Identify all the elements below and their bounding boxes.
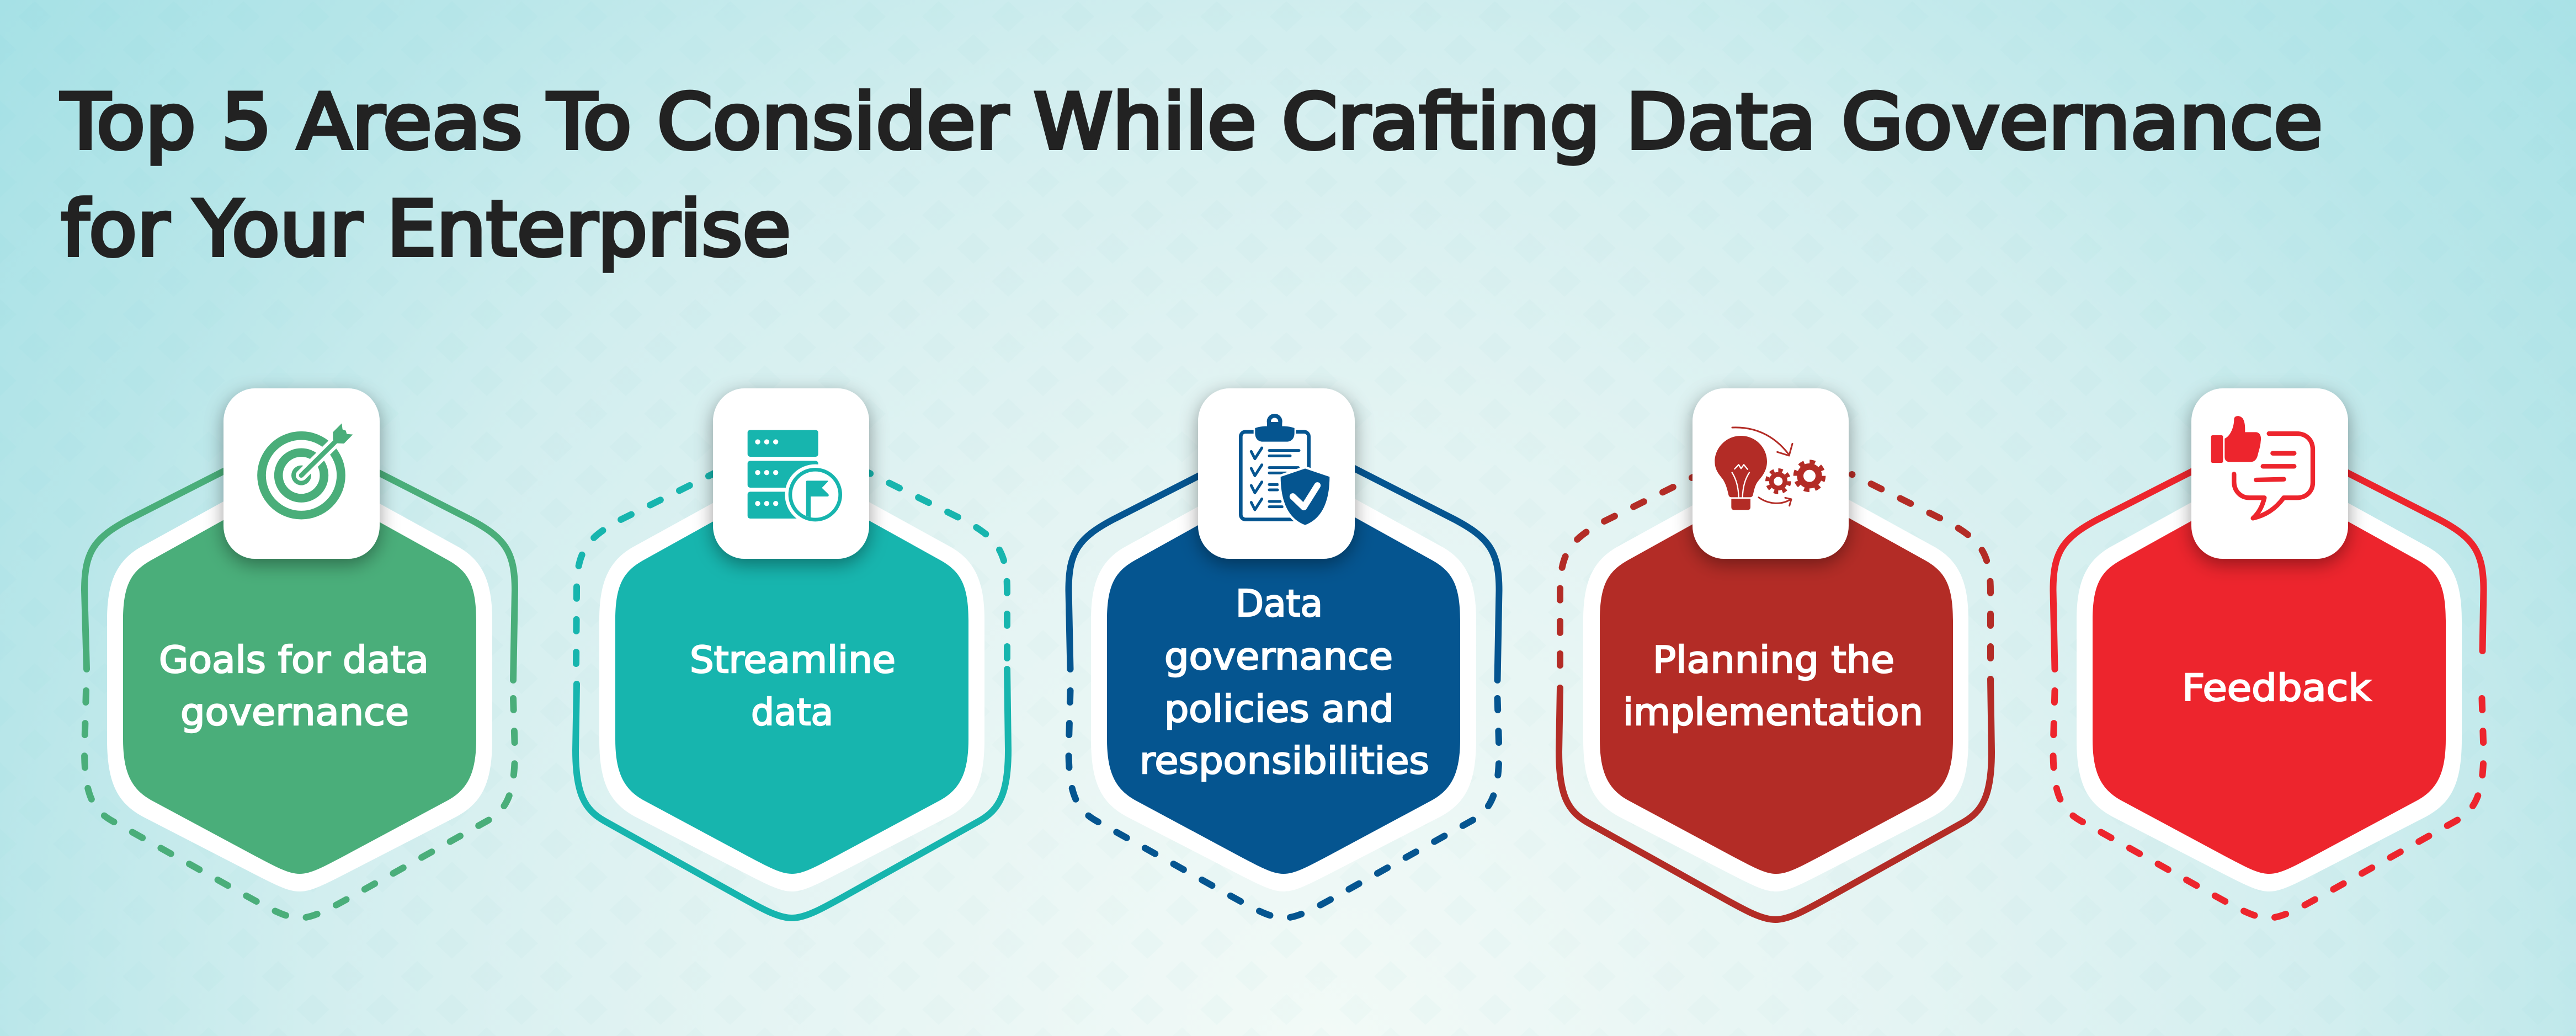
label: data <box>751 691 833 734</box>
label: responsibilities <box>1140 739 1429 782</box>
white hexagon border <box>599 460 984 891</box>
icon card <box>2191 388 2348 559</box>
white hexagon border <box>1583 460 1968 891</box>
label <box>1623 638 1923 734</box>
icon card <box>1198 388 1355 559</box>
panel: goals for data governance <box>84 388 515 918</box>
icon: thumbs up with speech bubble <box>2211 416 2313 518</box>
blue hexagon <box>1107 478 1460 874</box>
title <box>61 77 2323 274</box>
label: Streamline <box>690 638 896 681</box>
label <box>159 638 429 734</box>
label <box>690 638 896 734</box>
white hexagon border <box>1091 460 1476 891</box>
icon: light bulb, arrows and gears <box>1715 428 1824 510</box>
outer ring: solid top, dashed bottom <box>84 432 515 918</box>
icon card <box>1693 388 1849 559</box>
panel: planning the implementation <box>1559 388 1992 920</box>
label: governance <box>1164 635 1393 678</box>
label: policies and <box>1164 687 1394 730</box>
icon: clipboard checklist with shield <box>1241 416 1329 525</box>
panel: streamline data <box>576 388 1008 918</box>
outer ring: solid top, dashed bottom <box>2053 432 2483 918</box>
icon card <box>713 388 869 559</box>
outer ring: dashed top, solid bottom <box>1559 474 1992 920</box>
label: implementation <box>1623 691 1923 734</box>
label: Feedback <box>2182 666 2371 709</box>
icon: server stack with flag <box>748 430 845 525</box>
title: Top 5 Areas To Consider While Crafting Data Governance <box>61 77 2323 167</box>
label: Planning the <box>1653 638 1894 681</box>
outer ring: solid top, dashed bottom <box>1068 432 1499 918</box>
panel: data governance policies and responsibilities <box>1068 388 1499 918</box>
icon card <box>223 388 380 559</box>
outer ring: dashed top, solid bottom <box>576 473 1008 918</box>
label: Data <box>1236 582 1323 625</box>
title: for Your Enterprise <box>61 184 791 274</box>
white hexagon border <box>107 460 492 891</box>
green hexagon <box>123 478 476 874</box>
dark red hexagon <box>1600 478 1953 874</box>
label: Goals for data <box>159 638 429 681</box>
red hexagon <box>2093 478 2446 874</box>
label: governance <box>180 691 409 734</box>
icon: target with arrow <box>262 423 353 515</box>
panel: feedback <box>2053 388 2483 918</box>
white hexagon border <box>2077 460 2462 891</box>
label <box>1140 582 1429 782</box>
teal hexagon <box>615 478 968 874</box>
